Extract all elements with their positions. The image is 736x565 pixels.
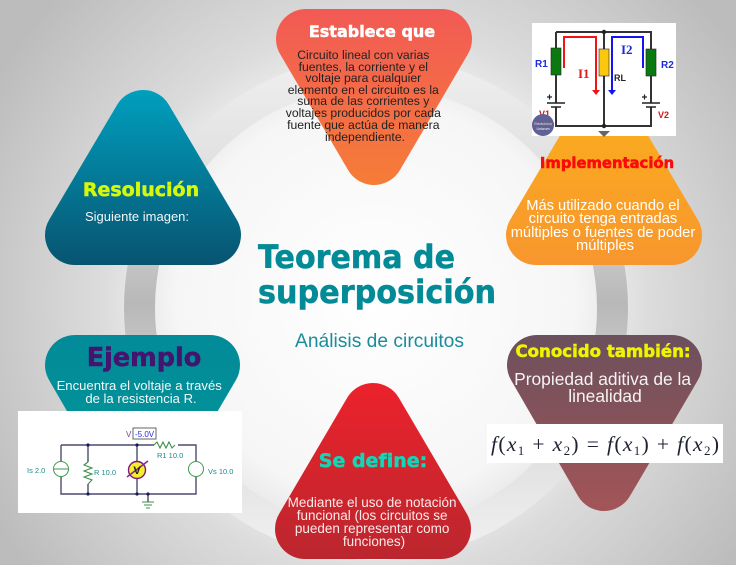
- text: establece que: fuente que actúa de manera: [287, 118, 440, 132]
- image: two-source circuit: R1: [535, 59, 548, 70]
- text: se define: pueden representar como: [295, 521, 449, 536]
- text: establece que: Circuito lineal con varias: [297, 48, 429, 62]
- text: establece que: fuentes, la corriente y el: [299, 60, 428, 74]
- text: establece que: voltajes producidos por cada: [286, 106, 441, 120]
- text: resolucion: Siguiente imagen:: [85, 209, 189, 224]
- heading: se define: Se define:: [319, 450, 427, 472]
- text: conocido tambien: linealidad: [568, 386, 642, 406]
- heading: implementacion: Implementación: [540, 155, 674, 172]
- panel: implementacion: [511, 120, 699, 254]
- image: additivity formula: [487, 424, 723, 463]
- image: example circuit: Is 2.0: [27, 466, 45, 475]
- text: conocido tambien: Propiedad aditiva de la: [514, 369, 691, 389]
- image: two-source circuit: I1: [578, 66, 590, 81]
- text: implementacion: múltiples: [576, 238, 634, 254]
- panel: establece que: [286, 22, 444, 155]
- image: two-source circuit: Electrónica: [534, 122, 552, 126]
- heading: ejemplo: Ejemplo: [87, 343, 201, 373]
- image: example circuit: V: [133, 465, 141, 477]
- image: additivity formula: x: [552, 432, 563, 456]
- image: additivity formula: +: [526, 432, 551, 456]
- subtitle: Análisis de circuitos: [295, 330, 464, 352]
- image: additivity formula: 2: [564, 443, 570, 458]
- heading: conocido tambien: Conocido también:: [515, 342, 691, 361]
- image: example circuit: [18, 411, 242, 513]
- text: se define: Mediante el uso de notación: [288, 495, 457, 510]
- image: two-source circuit: R2: [661, 60, 674, 71]
- image: additivity formula: 2: [704, 443, 710, 458]
- image: additivity formula: 1: [634, 443, 640, 458]
- image: example circuit: V: [126, 430, 132, 439]
- image: two-source circuit: [532, 23, 676, 137]
- text: implementacion: múltiples o fuentes de poder: [511, 225, 695, 241]
- panel: conocido tambien: [514, 342, 696, 481]
- image: additivity formula: ) =: [571, 432, 606, 456]
- image: additivity formula: 1: [518, 443, 524, 458]
- central ring: [140, 72, 612, 544]
- panel: ejemplo: [57, 343, 225, 481]
- image: example circuit: R1 10.0: [157, 451, 183, 460]
- title: Teorema de: [258, 238, 455, 276]
- image: two-source circuit: RL: [614, 73, 626, 83]
- image: additivity formula: ): [712, 432, 719, 456]
- image: additivity formula: ) +: [642, 432, 676, 456]
- image: two-source circuit: Unicrom: [536, 127, 550, 131]
- image: additivity formula: f(x: [607, 432, 632, 456]
- image: additivity formula: f(x: [677, 432, 703, 456]
- title: superposición: [258, 273, 496, 311]
- image: example circuit: Vs 10.0: [208, 467, 233, 476]
- image: two-source circuit: V2: [658, 110, 669, 120]
- text: implementacion: circuito tenga entradas: [529, 211, 677, 227]
- text: establece que: independiente.: [325, 130, 405, 144]
- panel: resolucion: [75, 120, 211, 235]
- heading: establece que: Establece que: [309, 22, 435, 41]
- panel: se define: [288, 413, 460, 549]
- text: se define: funciones): [343, 534, 405, 549]
- text: establece que: voltaje para cualquier: [305, 71, 421, 85]
- image: two-source circuit: V1: [539, 109, 550, 119]
- image: two-source circuit: I2: [621, 42, 633, 57]
- image: additivity formula: f(x: [491, 432, 516, 456]
- image: example circuit: R 10.0: [94, 468, 116, 477]
- text: establece que: suma de las corrientes y: [297, 94, 430, 108]
- text: implementacion: Más utilizado cuando el: [526, 198, 680, 214]
- text: ejemplo: de la resistencia R.: [85, 391, 197, 406]
- text: se define: funcional (los circuitos se: [297, 508, 448, 523]
- text: establece que: elemento en el circuito es la: [288, 83, 439, 97]
- heading: resolucion: Resolución: [83, 179, 199, 201]
- image: example circuit: -5.0V: [135, 430, 155, 439]
- text: ejemplo: Encuentra el voltaje a través: [57, 378, 222, 393]
